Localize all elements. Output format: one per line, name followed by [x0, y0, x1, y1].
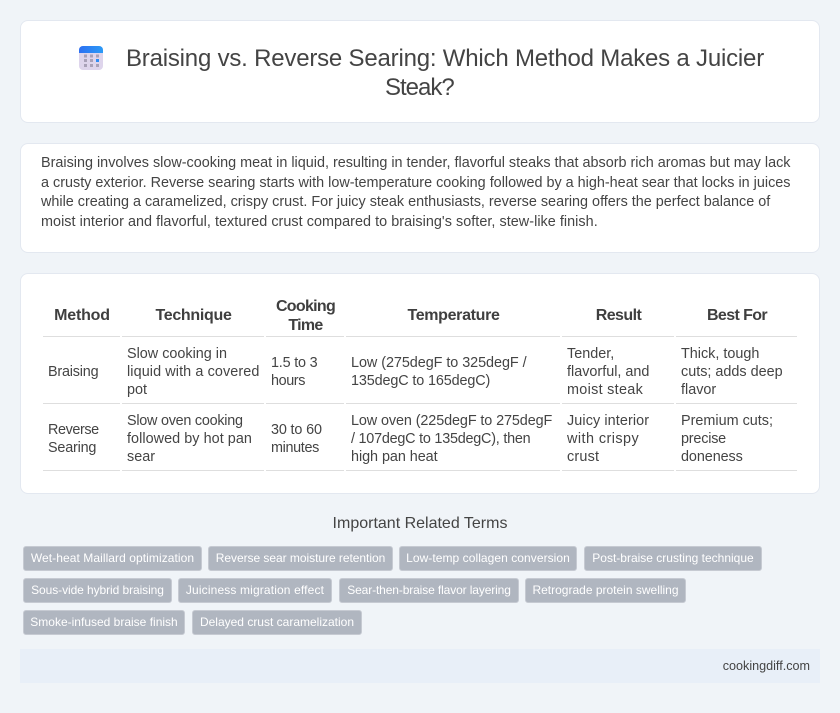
- title: [126, 45, 764, 101]
- row: Braising: 135degC to 165degC): [351, 373, 490, 389]
- table header: Result: [596, 307, 641, 324]
- tags: related terms: Juiciness migration effect: [186, 583, 324, 597]
- tags: related terms: Reverse sear moisture retention: [216, 551, 385, 565]
- title: Braising vs. Reverse Searing: Which Method Makes a Juicier: [126, 45, 764, 72]
- table header: [43, 298, 797, 337]
- tags: related terms: Low-temp collagen conversion: [406, 551, 570, 565]
- tags: related terms: Retrograde protein swelling: [532, 583, 679, 597]
- table header: Cooking: [276, 298, 335, 315]
- row: Braising: Slow cooking in: [127, 346, 227, 362]
- tags: related terms: Sear-then-braise flavor layering: [347, 583, 511, 597]
- row: Reverse Searing: doneness: [681, 449, 743, 465]
- row: Reverse Searing: sear: [127, 449, 155, 465]
- row: Braising: moist steak: [567, 382, 643, 398]
- row: Reverse Searing: Juicy interior: [567, 413, 649, 429]
- row: Reverse Searing: Searing: [48, 440, 96, 456]
- table header: Time: [288, 317, 323, 334]
- tags: related terms: Wet-heat Maillard optimization: [31, 551, 194, 565]
- row: Reverse Searing: crust: [567, 449, 599, 465]
- row: Braising: Low (275degF to 325degF /: [351, 355, 527, 371]
- footer: [20, 649, 820, 683]
- panel: introduction: [20, 143, 820, 253]
- tags: related terms: Smoke-infused braise finish: [30, 615, 178, 629]
- text block: introduction: a crusty exterior. Reverse searing starts with low-temperature cooking followed by a high-heat sear that locks in juices: [41, 175, 790, 191]
- row: Reverse Searing: 30 to 60: [271, 422, 322, 438]
- row: Braising: [43, 346, 797, 404]
- title: Steak?: [385, 74, 454, 101]
- row: Reverse Searing: [43, 413, 797, 471]
- icon: calendar: [79, 46, 103, 70]
- row: Reverse Searing: followed by hot pan: [127, 431, 252, 447]
- heading: related terms: Important Related Terms: [333, 515, 507, 532]
- text block: introduction: [41, 155, 790, 230]
- tags: related terms: [23, 546, 762, 635]
- row: Reverse Searing: precise: [681, 431, 726, 447]
- tags: related terms: Sous-vide hybrid braising: [31, 583, 164, 597]
- panel: header: [20, 20, 820, 123]
- row: Braising: liquid with a covered: [127, 364, 260, 380]
- tags: related terms: Delayed crust caramelization: [200, 615, 354, 629]
- row: Braising: flavor: [681, 382, 716, 398]
- row: Braising: hours: [271, 373, 305, 389]
- row: Reverse Searing: Reverse: [48, 422, 99, 438]
- row: Braising: Braising: [48, 364, 98, 380]
- text block: introduction: while creating a caramelized, crispy crust. For juicy steak enthusiasts, reverse searing offers the perfect balance of: [41, 194, 770, 210]
- table header: Technique: [155, 307, 232, 324]
- row: Braising: flavorful, and: [567, 364, 649, 380]
- footer text: cookingdiff.com: [723, 659, 810, 673]
- row: Braising: Thick, tough: [681, 346, 759, 362]
- row: Reverse Searing: high pan heat: [351, 449, 438, 465]
- row: Reverse Searing: / 107degC to 135degC), then: [351, 431, 530, 447]
- row: Reverse Searing: Slow oven cooking: [127, 413, 243, 429]
- row: Reverse Searing: minutes: [271, 440, 319, 456]
- text block: introduction: moist interior and flavorful, textured crust compared to braising's softer, stew-like finish.: [41, 214, 598, 230]
- row: Reverse Searing: Premium cuts;: [681, 413, 773, 429]
- row: Braising: Tender,: [567, 346, 614, 362]
- row: Braising: cuts; adds deep: [681, 364, 783, 380]
- table header: Method: [54, 307, 110, 324]
- row: Reverse Searing: with crispy: [567, 431, 639, 447]
- row: Reverse Searing: Low oven (225degF to 275degF: [351, 413, 552, 429]
- text block: introduction: Braising involves slow-cooking meat in liquid, resulting in tender, flavorful steaks that absorb rich aromas but may lack: [41, 155, 790, 171]
- tags: related terms: Post-braise crusting technique: [592, 551, 754, 565]
- panel: comparison table: [20, 273, 820, 494]
- table header: Best For: [707, 307, 767, 324]
- row: Braising: 1.5 to 3: [271, 355, 317, 371]
- table header: Temperature: [407, 307, 500, 324]
- row: Braising: pot: [127, 382, 147, 398]
